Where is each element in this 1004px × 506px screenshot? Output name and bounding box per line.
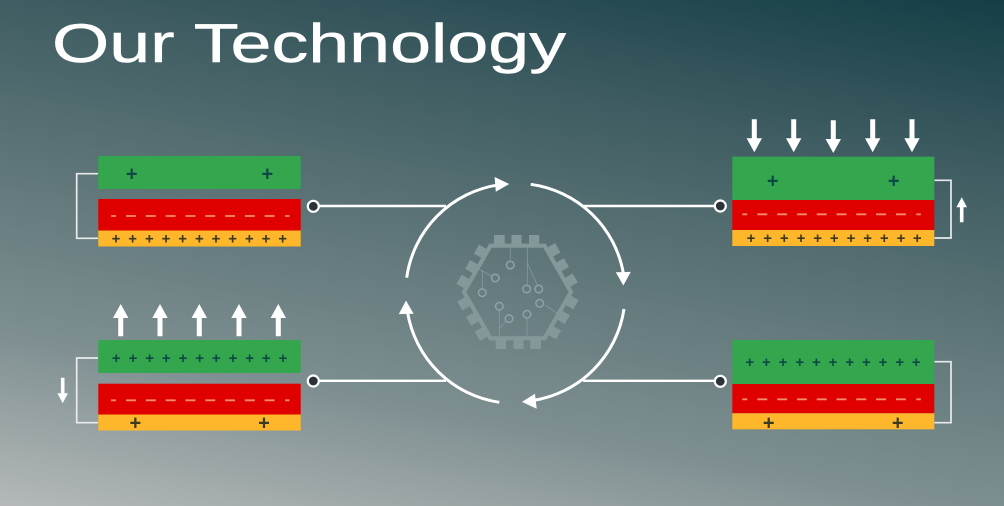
title: Our Technology <box>52 12 567 74</box>
arrow: top to right <box>531 184 631 286</box>
green layer <box>98 156 301 189</box>
red layer <box>98 199 301 230</box>
chip traces <box>477 247 557 338</box>
green layer charges: ++ <box>126 164 273 186</box>
yellow layer charges: ++ <box>129 413 270 435</box>
icon: hexagonal chip <box>456 235 579 349</box>
negative charges <box>111 215 290 217</box>
green layer <box>732 157 934 200</box>
panel: bottom-left cell <box>57 304 319 435</box>
arrow: bottom to left <box>399 300 499 402</box>
arrow: right to bottom <box>522 309 624 409</box>
circuit bracket <box>77 358 98 423</box>
panel: top-left cell <box>77 156 319 248</box>
yellow layer <box>732 230 934 246</box>
circuit bracket <box>934 180 951 238</box>
chip teeth <box>456 235 579 349</box>
connector dot <box>308 201 319 212</box>
green layer <box>98 340 301 373</box>
connector lines <box>318 206 715 381</box>
current arrow up <box>956 197 967 222</box>
yellow layer charges: +++++++++++ <box>747 230 922 247</box>
circuit bracket <box>934 362 951 423</box>
negative charges <box>742 213 921 215</box>
yellow layer charges: +++++++++++ <box>112 230 287 248</box>
green layer <box>732 340 934 384</box>
green layer charges: +++++++++++ <box>112 350 288 367</box>
arrow: left to top <box>407 177 509 278</box>
connector dot <box>715 376 726 387</box>
upward arrows <box>113 304 286 336</box>
circuit bracket <box>77 174 98 238</box>
connector dot <box>715 200 726 212</box>
chip outline <box>464 246 571 338</box>
cycle arrows <box>399 177 631 409</box>
yellow layer <box>732 413 934 429</box>
negative charges <box>742 398 921 400</box>
yellow layer <box>98 414 301 430</box>
red layer <box>732 384 934 413</box>
connector dot <box>308 376 319 386</box>
panel: top-right cell <box>715 119 967 247</box>
red layer <box>732 200 934 230</box>
green layer charges: +++++++++++ <box>745 354 921 371</box>
yellow layer <box>98 230 301 246</box>
negative charges <box>111 399 290 401</box>
chip nodes <box>478 261 544 323</box>
green layer charges: ++ <box>767 171 900 193</box>
yellow layer charges: ++ <box>763 412 904 434</box>
red layer <box>98 384 301 414</box>
current arrow down <box>57 378 68 403</box>
panel: bottom-right cell <box>715 340 951 434</box>
downward arrows <box>747 119 920 153</box>
